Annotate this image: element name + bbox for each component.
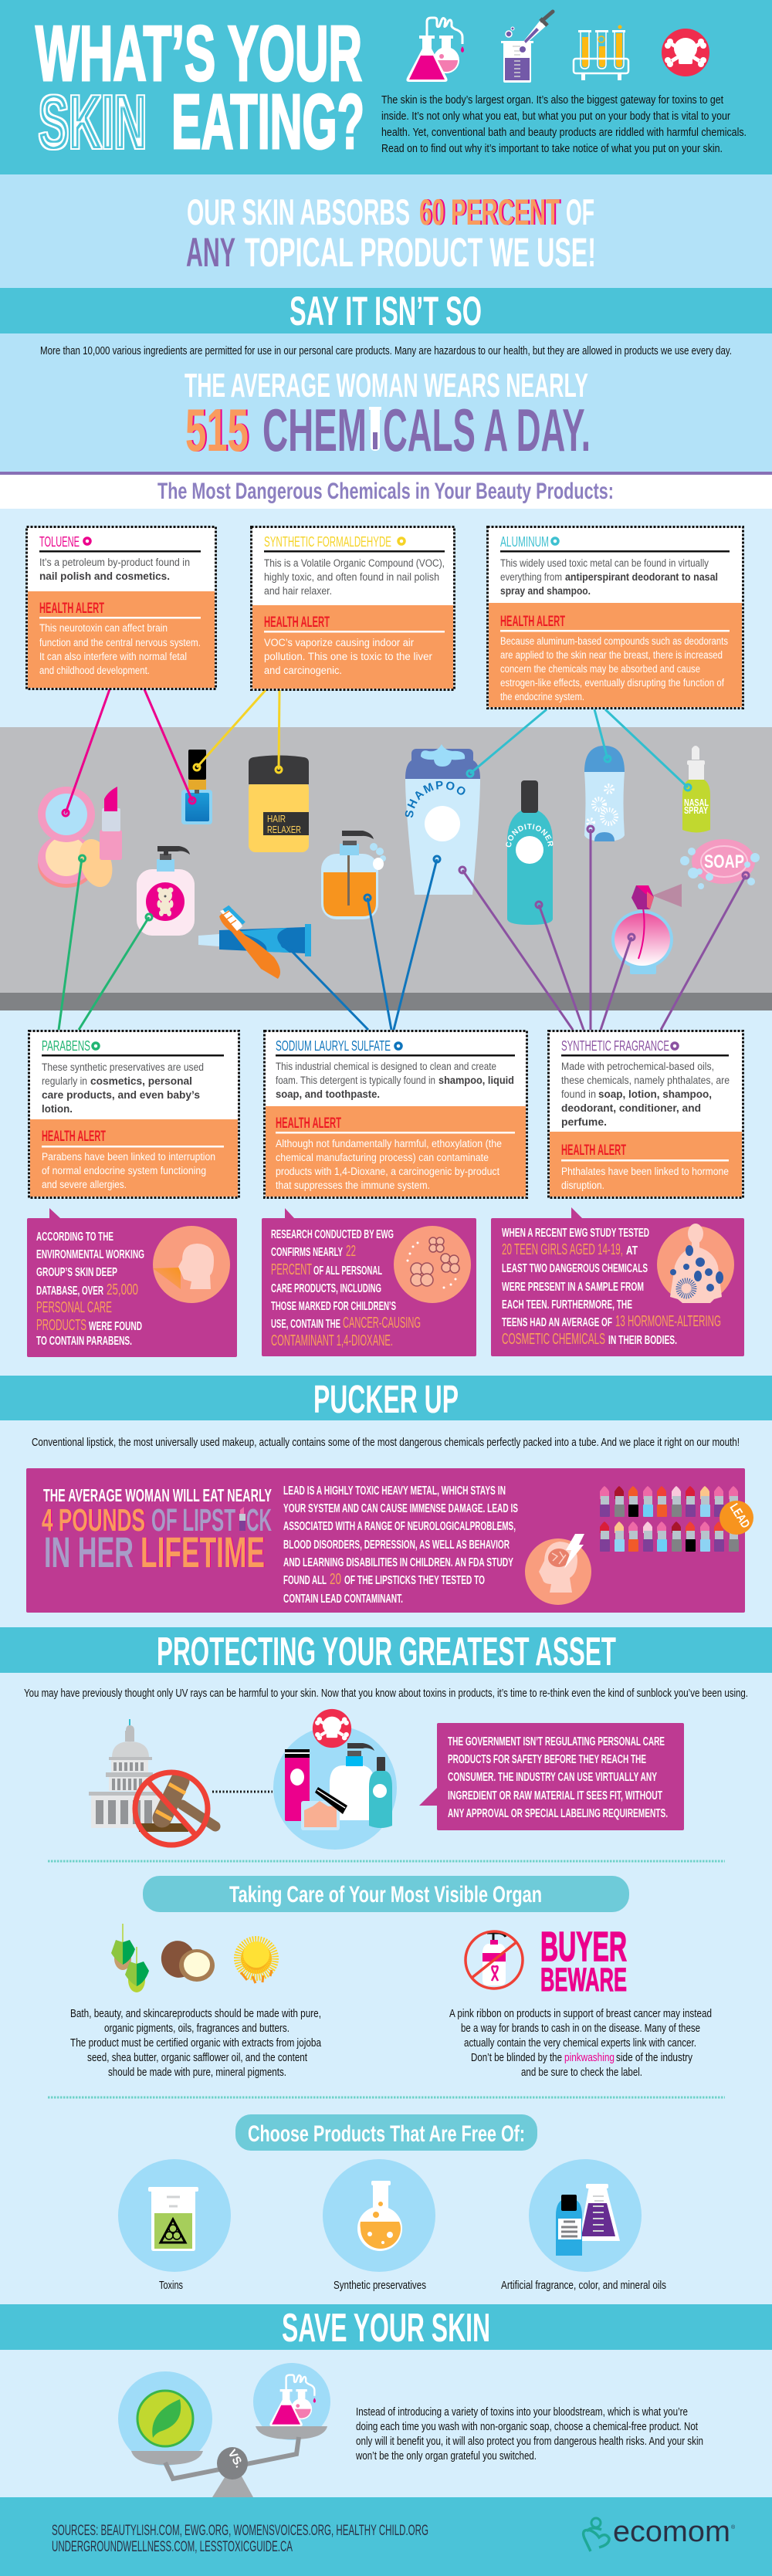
callout: parabens database: 25,000: [107, 1281, 138, 1298]
panel: parabens: and severe allergies.: [42, 1179, 127, 1190]
panel: aluminum: antiperspirant deodorant to nasal: [565, 570, 718, 583]
product: nasal spray: NASAL: [684, 797, 709, 808]
icon: scale comparison: [118, 2363, 330, 2497]
stat: 4 pounds: OF LIPST: [151, 1502, 235, 1538]
headline: 60 percent: [186, 191, 596, 276]
callout: parabens database: DATABASE, OVER: [36, 1285, 103, 1298]
panel: sodium lauryl sulfate: products with 1,4-Dioxane, a carcinogenic by-product: [276, 1166, 499, 1177]
panel: toluene: It’s a petroleum by-product found in: [39, 557, 190, 568]
text: ingredients to choose: The product must be certified organic with extracts from jojoba: [70, 2037, 322, 2050]
panel: aluminum: HEALTH ALERT: [500, 614, 565, 630]
pill heading: taking care: Taking Care of Your Most Visible Organ: [229, 1882, 542, 1907]
panel: toluene: It can also interfere with normal fetal: [39, 651, 187, 662]
panel: aluminum: the endocrine system.: [500, 691, 584, 702]
text: lead facts: LEAD IS A HIGHLY TOXIC HEAVY METAL, WHICH STAYS IN: [283, 1484, 506, 1498]
text: lead facts: BLOOD DISORDERS, DEPRESSION, AS WELL AS BEHAVIOR: [283, 1538, 510, 1552]
headline: 515 chemicals: CHEM: [262, 396, 367, 464]
heading: SODIUM LAURYL SULFATE: [276, 1038, 391, 1054]
panel: aluminum: everything from: [500, 571, 562, 583]
product: toothpaste and brush: [198, 908, 311, 979]
callout: EWG research: THOSE MARKED FOR CHILDREN’S: [271, 1300, 396, 1313]
callout: parabens database: GROUP’S SKIN DEEP: [36, 1266, 117, 1279]
pill heading: choose products: Choose Products That Are Free Of:: [248, 2121, 525, 2147]
logo: ecomom: [584, 2516, 736, 2551]
text: ingredients to choose: seed, shea butter, organic safflower oil, and the content: [87, 2052, 307, 2064]
connector lines: sodium lauryl sulfate: [282, 856, 440, 1030]
panel: synthetic formaldehyde: HEALTH ALERT: [264, 614, 330, 631]
text: ingredients to choose: Bath, beauty, and skincareproducts should be made with pure,: [70, 2008, 321, 2020]
panel: sodium lauryl sulfate: [264, 1031, 527, 1198]
panel: parabens: Parabens have been linked to interruption: [42, 1151, 215, 1163]
product: hair relaxer: [249, 755, 309, 852]
panel: sodium lauryl sulfate: Although not fundamentally harmful, ethoxylation (the: [276, 1138, 502, 1149]
icon: shea nut: [157, 1937, 215, 1982]
band: pucker up: PUCKER UP: [313, 1377, 459, 1421]
text: choose chemical-free: [355, 2406, 703, 2463]
heading: ALUMINUM: [500, 534, 549, 550]
product: hair relaxer: HAIR: [267, 813, 286, 824]
product: nasal spray: SPRAY: [684, 804, 708, 816]
callout: parabens database: WERE FOUND: [89, 1320, 142, 1333]
panel: toluene: nail polish and cosmetics.: [39, 570, 170, 582]
panel: synthetic formaldehyde: pollution. This one is toxic to the liver: [264, 651, 432, 662]
sources: [52, 2523, 428, 2555]
icon: toxic products: [273, 1709, 397, 1850]
label: Toxins: [159, 2280, 183, 2292]
heading: buyer beware: [540, 1924, 627, 1999]
callout: teen girls study: IN THEIR BODIES.: [608, 1334, 677, 1347]
panel: synthetic formaldehyde: highly toxic, and often found in nail polish: [264, 571, 439, 583]
text: lead facts: OF THE LIPSTICKS THEY TESTED TO: [344, 1574, 485, 1587]
band: say it isn't so: [0, 288, 772, 334]
band: save your skin: SAVE YOUR SKIN: [282, 2306, 490, 2351]
product: perfume: [611, 884, 682, 974]
connector lines: toluene: [63, 689, 195, 816]
panel: toluene: HEALTH ALERT: [39, 601, 104, 617]
callout: parabens database: ACCORDING TO THE: [36, 1230, 113, 1244]
icon: fragrance and oils: [501, 2159, 666, 2292]
icon: lipstick rows: [600, 1486, 739, 1552]
text: ingredients to choose: should be made with pure, mineral pigments.: [108, 2067, 286, 2079]
text: pinkwashing: A pink ribbon on products in support of breast cancer may instead: [449, 2008, 712, 2020]
panel: parabens: [29, 1031, 239, 1198]
panel: sodium lauryl sulfate: HEALTH ALERT: [276, 1115, 341, 1132]
icon: flasks: [406, 18, 464, 82]
callout: teen girls study: COSMETIC CHEMICALS: [502, 1331, 605, 1348]
text: lead facts: AND LEARNING DISABILITIES IN CHILDREN. AN FDA STUDY: [283, 1556, 513, 1569]
icon: preservatives flask: [323, 2159, 435, 2292]
product: nail polish: [181, 750, 212, 824]
text: lead facts: YOUR SYSTEM AND CAN CAUSE IMMENSE DAMAGE. LEAD IS: [283, 1502, 518, 1515]
panel: synthetic formaldehyde: [252, 526, 454, 690]
panel: toluene: [26, 526, 216, 689]
heading: SYNTHETIC FRAGRANCE: [561, 1038, 669, 1054]
panel: parabens: lotion.: [42, 1102, 73, 1115]
band: pucker up: [0, 1376, 772, 1421]
text: lead facts: ASSOCIATED WITH A RANGE OF NEUROLOGICALPROBLEMS,: [283, 1520, 516, 1533]
panel: sodium lauryl sulfate: that suppresses the immune system.: [276, 1180, 430, 1191]
heading: buyer beware: BUYER: [540, 1924, 627, 1970]
panel: sodium lauryl sulfate: This industrial chemical is designed to clean and create: [276, 1061, 496, 1072]
callout: EWG research: CARE PRODUCTS, INCLUDING: [271, 1282, 381, 1295]
callout: EWG research: PERCENT: [271, 1261, 312, 1278]
product: baby lotion: [137, 846, 195, 936]
connector lines: aluminum: [467, 709, 691, 790]
panel: synthetic fragrance: found in: [561, 1088, 596, 1100]
logo: ecomom: ecomom: [613, 2516, 730, 2548]
panel: synthetic formaldehyde: and carcinogenic.: [264, 665, 342, 676]
panel: synthetic fragrance: perfume.: [561, 1115, 607, 1128]
panel: parabens: care products, and even baby’s: [42, 1088, 200, 1101]
connector lines: fragrance: [459, 826, 749, 1030]
badge: lead: LEAD: [727, 1501, 752, 1531]
title: [36, 11, 364, 165]
product: compact: [38, 787, 118, 892]
text: ingredients to choose: [70, 2008, 322, 2079]
heading: SYNTHETIC FORMALDEHYDE: [264, 534, 391, 550]
icon: test tubes: [574, 25, 628, 80]
callout: parabens database: PERSONAL CARE: [36, 1299, 112, 1316]
callout: teen girls study: TEENS HAD AN AVERAGE OF: [502, 1316, 612, 1329]
text: pinkwashing: Don’t be blinded by the: [471, 2052, 562, 2064]
callout: teen girls study: AT: [626, 1244, 638, 1258]
callout: EWG research: USE, CONTAIN THE: [271, 1318, 340, 1331]
pill heading: taking care: [143, 1876, 629, 1912]
panel: aluminum: spray and shampoo.: [500, 584, 591, 597]
icon: head inhaling: [153, 1226, 230, 1303]
panel: toluene: This neurotoxin can affect brain: [39, 622, 168, 634]
title: EATING?: [171, 79, 364, 165]
logo: ecomom: ®: [731, 2524, 736, 2530]
panel: aluminum: Because aluminum-based compounds such as deodorants: [500, 635, 728, 647]
pill heading: choose products: [235, 2114, 537, 2151]
headline: 515 chemicals: CALS A DAY.: [383, 396, 591, 464]
callout: parabens database: PRODUCTS: [36, 1317, 86, 1334]
icon: jojoba seeds: [111, 1924, 149, 1992]
callout: government not regulating: [419, 1723, 684, 1830]
stat: 4 pounds: LIFETIME: [141, 1528, 265, 1576]
panel: sodium lauryl sulfate: chemical manufacturing process) can contaminate: [276, 1152, 489, 1163]
panel: parabens: HEALTH ALERT: [42, 1129, 106, 1145]
headline: 515 chemicals: 515: [185, 396, 249, 464]
panel: synthetic formaldehyde: VOC’s vaporize causing indoor air: [264, 637, 414, 648]
callout: teen girls study: EACH TEEN. FURTHERMORE, THE: [502, 1298, 632, 1312]
text: pinkwashing: be a way for brands to cash in on the disease. Many of these: [461, 2023, 700, 2035]
product: deodorant: [584, 746, 625, 841]
sources: SOURCES: BEAUTYLISH.COM, EWG.ORG, WOMENSVOICES.ORG, HEALTHY CHILD.ORG: [52, 2523, 428, 2539]
product: hair relaxer: RELAXER: [267, 824, 301, 835]
icon: body with toxins: [657, 1224, 734, 1303]
panel: lead in lipstick: [26, 1468, 753, 1613]
callout: EWG research: RESEARCH CONDUCTED BY EWG: [271, 1228, 394, 1241]
icon: skull: [662, 29, 709, 76]
label: Synthetic preservatives: [334, 2280, 426, 2292]
panel: parabens: These synthetic preservatives are used: [42, 1061, 204, 1073]
connector lines: parabens: [59, 855, 152, 1030]
badge: lead: [720, 1501, 753, 1535]
panel: sodium lauryl sulfate: soap, and toothpaste.: [276, 1088, 380, 1100]
stat: 4 pounds: 4 POUNDS: [42, 1502, 145, 1538]
intro text: [381, 94, 747, 155]
text: pinkwashing: [449, 2008, 712, 2079]
headline: 60 percent: ANY: [186, 230, 235, 276]
leaf badge: [137, 2391, 193, 2446]
headline: 60 percent: OF: [566, 191, 594, 232]
sources: UNDERGROUNDWELLNESS.COM, LESSTOXICGUIDE.CA: [52, 2539, 293, 2555]
intro text: Read on to find out why it’s important to take notice of what you put on your skin.: [381, 143, 723, 155]
text: pinkwashing: side of the industry: [616, 2052, 693, 2064]
panel: sodium lauryl sulfate: shampoo, liquid: [438, 1074, 514, 1086]
callout: teen girls study: 20 TEEN GIRLS AGED 14-19,: [502, 1241, 623, 1258]
title: SKIN: [39, 80, 147, 164]
heading: buyer beware: BEWARE: [540, 1962, 627, 1999]
callout: EWG research: CANCER-CAUSING: [343, 1315, 421, 1332]
product: lipstick: [100, 787, 122, 860]
icon: head with brain: [525, 1534, 591, 1605]
callout: EWG research: OF ALL PERSONAL: [313, 1264, 382, 1278]
panel: synthetic formaldehyde: This is a Volatile Organic Compound (VOC),: [264, 557, 445, 569]
header band: [0, 0, 772, 174]
text: pinkwashing: and be sure to check the label.: [521, 2067, 642, 2079]
panel: synthetic fragrance: Made with petrochemical-based oils,: [561, 1061, 714, 1072]
stat: 4 pounds: THE AVERAGE WOMAN WILL EAT NEARLY: [43, 1485, 272, 1505]
headline: 60 percent: 60 PERCENT: [419, 191, 560, 232]
stat: 4 pounds: IN HER: [44, 1528, 134, 1576]
text: lead facts: CONTAIN LEAD CONTAMINANT.: [283, 1593, 403, 1606]
panel: synthetic fragrance: HEALTH ALERT: [561, 1142, 626, 1159]
text: lead facts: 20: [330, 1571, 341, 1588]
product: soap bar: SOAP: [704, 851, 744, 872]
callout: EWG research: CONFIRMS NEARLY: [271, 1246, 343, 1259]
text: choose chemical-free: Instead of introducing a variety of toxins into your bloodstream, which is what you’re: [356, 2406, 688, 2419]
connector lines: formaldehyde: [194, 690, 282, 773]
product: shampoo: SHAMPOO: [405, 781, 466, 818]
icon: cell clusters: [394, 1226, 471, 1303]
footer: [0, 2497, 772, 2576]
icon: capitol with gavel: [89, 1719, 215, 1845]
product: nasal spray: [682, 746, 710, 832]
icon: safflower: [239, 1941, 273, 1983]
text: ingredients to choose: organic pigments, oils, fragrances and butters.: [104, 2023, 290, 2035]
product: soap bar: [680, 839, 760, 889]
callout: parabens database: [27, 1208, 237, 1357]
callout: government not regulating: INGREDIENT OR RAW MATERIAL IT SEES FIT, WITHOUT: [448, 1789, 662, 1803]
text: lead facts: FOUND ALL: [283, 1574, 327, 1587]
panel: aluminum: estrogen-like effects, eventually disrupting the function of: [500, 677, 724, 689]
text: lead facts: [283, 1484, 518, 1606]
panel: parabens: of normal endocrine system functioning: [42, 1165, 206, 1176]
title: WHAT’S YOUR: [36, 11, 362, 97]
panel: synthetic formaldehyde: and hair relaxer.: [264, 585, 332, 597]
heading: PARABENS: [42, 1038, 90, 1054]
icon: beaker with dropper: [501, 12, 553, 83]
callout: EWG research: [262, 1208, 476, 1356]
panel: aluminum: are applied to the skin near the breast, there is increased: [500, 649, 723, 661]
callout: government not regulating: CONSUMER. THE INDUSTRY CAN USE VIRTUALLY ANY: [448, 1771, 657, 1784]
stat: 4 pounds: [42, 1485, 272, 1576]
panel: synthetic fragrance: soap, lotion, shampoo,: [598, 1088, 712, 1100]
product: conditioner: CONDITIONER: [506, 824, 553, 848]
icon: test tube i: [369, 407, 381, 451]
panel: toluene: function and the central nervous system.: [39, 637, 201, 648]
panel: aluminum: This widely used toxic metal can be found in virtually: [500, 557, 709, 569]
product: liquid soap: [321, 831, 386, 919]
icon: toxins beaker: [118, 2159, 231, 2292]
callout: teen girls study: WERE PRESENT IN A SAMPLE FROM: [502, 1281, 644, 1294]
heading: TOLUENE: [39, 534, 80, 550]
label: Artificial fragrance, color, and mineral oils: [501, 2280, 666, 2292]
callout: parabens database: ENVIRONMENTAL WORKING: [36, 1248, 144, 1261]
band: say it isn't so: SAY IT ISN’T SO: [290, 289, 482, 334]
headline: 60 percent: OUR SKIN ABSORBS: [187, 191, 410, 232]
panel: synthetic fragrance: these chemicals, namely phthalates, are: [561, 1075, 730, 1086]
callout: teen girls study: LEAST TWO DANGEROUS CHEMICALS: [502, 1262, 648, 1275]
shelf: [0, 727, 772, 1010]
panel: synthetic fragrance: deodorant, conditioner, and: [561, 1102, 701, 1114]
intro text: The skin is the body’s largest organ. It’s also the biggest gateway for toxins to get: [381, 94, 723, 107]
panel: synthetic fragrance: disruption.: [561, 1180, 604, 1191]
callout: EWG research: CONTAMINANT 1,4-DIOXANE.: [271, 1332, 393, 1349]
band: save your skin: [0, 2304, 772, 2351]
headline: 515 chemicals: [185, 367, 591, 464]
panel: synthetic fragrance: [548, 1031, 743, 1198]
callout: government not regulating: PRODUCTS FOR SAFETY BEFORE THEY REACH THE: [448, 1753, 646, 1766]
product: conditioner: [506, 780, 553, 925]
panel: parabens: cosmetics, personal: [90, 1075, 192, 1087]
panel: sodium lauryl sulfate: foam. This detergent is typically found in: [276, 1075, 435, 1086]
panel: parabens: regularly in: [42, 1075, 87, 1087]
callout: teen girls study: [491, 1207, 744, 1356]
text: choose chemical-free: doing each time you wash with non-organic soap, choose a chemical-free product. Not: [356, 2421, 698, 2433]
product: shampoo: [405, 744, 480, 895]
dotted connector: [212, 1791, 273, 1792]
callout: parabens database: TO CONTAIN PARABENS.: [36, 1335, 132, 1348]
icon: no pink-ribbon bottle: [466, 1931, 523, 1989]
callout: teen girls study: WHEN A RECENT EWG STUDY TESTED: [502, 1227, 649, 1240]
callout: EWG research: 22: [346, 1243, 356, 1260]
text: choose chemical-free: won’t be the only organ grateful you switched.: [355, 2450, 537, 2463]
panel: aluminum: concern the chemicals may be absorbed and cause: [500, 663, 700, 675]
panel: aluminum: [488, 526, 743, 709]
panel: toluene: and childhood development.: [39, 665, 150, 676]
icon: scale comparison: VS.: [225, 2447, 245, 2470]
text: pinkwashing: actually contain the very chemical experts link with cancer.: [464, 2037, 696, 2050]
text: pinkwashing: pinkwashing: [564, 2052, 615, 2064]
stat: 4 pounds: CK: [246, 1502, 272, 1538]
panel: synthetic fragrance: Phthalates have been linked to hormone: [561, 1166, 729, 1177]
